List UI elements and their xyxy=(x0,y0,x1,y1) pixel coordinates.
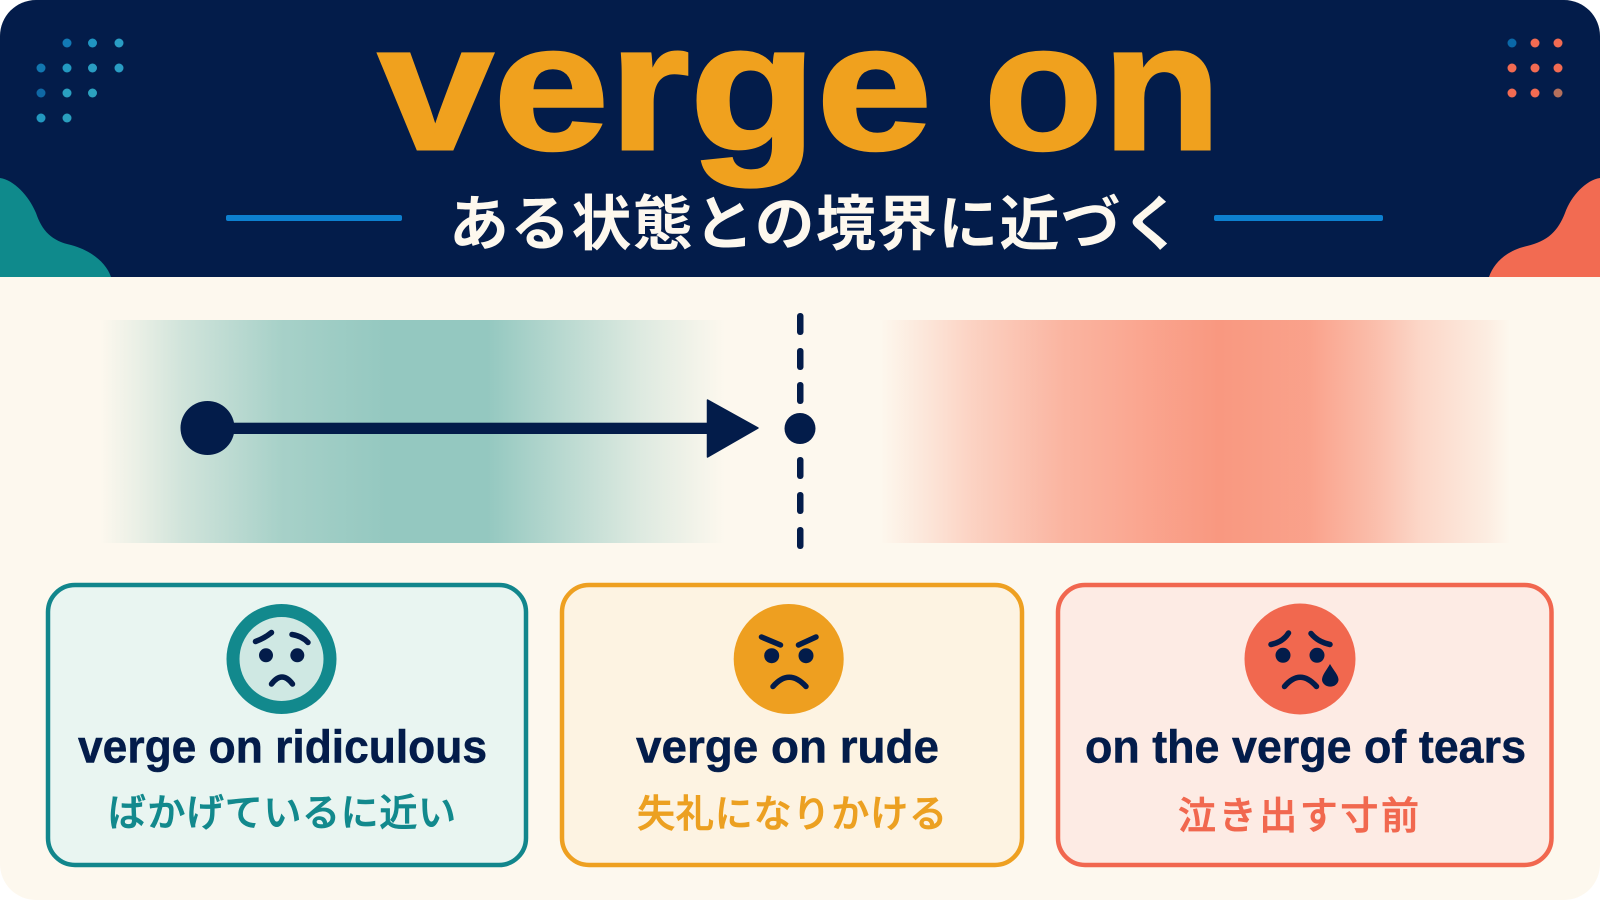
card title: verge on ridiculous xyxy=(78,720,487,772)
dot pattern: left xyxy=(36,38,124,122)
icon: crying face xyxy=(1244,604,1356,714)
icon: angry face xyxy=(734,604,844,714)
card translation: 失礼になりかける xyxy=(637,794,947,836)
card translation: ばかげているに近い xyxy=(108,793,456,835)
band: beyond the boundary xyxy=(880,320,1510,543)
title xyxy=(378,0,1221,188)
band: approaching zone xyxy=(100,320,725,543)
card: verge on rude xyxy=(562,585,1022,865)
dot pattern: right xyxy=(1508,38,1562,98)
icon: tear drop xyxy=(1322,664,1338,687)
decorative blob: coral xyxy=(1489,178,1600,277)
card: verge on ridiculous xyxy=(48,585,526,865)
arrow toward boundary xyxy=(180,400,758,457)
decorative blob: teal xyxy=(0,178,111,277)
subtitle: ある状態との境界に近づく xyxy=(449,191,1182,258)
icon: worried face xyxy=(233,610,330,708)
card title: verge on rude xyxy=(636,720,939,772)
card: on the verge of tears xyxy=(1058,585,1552,865)
subtitle rule: right xyxy=(1214,215,1383,221)
dashed boundary line xyxy=(797,313,804,549)
card translation: 泣き出す寸前 xyxy=(1178,796,1419,838)
card title: on the verge of tears xyxy=(1085,720,1526,772)
subtitle rule: left xyxy=(226,215,402,221)
header banner xyxy=(0,0,1600,277)
boundary dot xyxy=(784,413,816,444)
